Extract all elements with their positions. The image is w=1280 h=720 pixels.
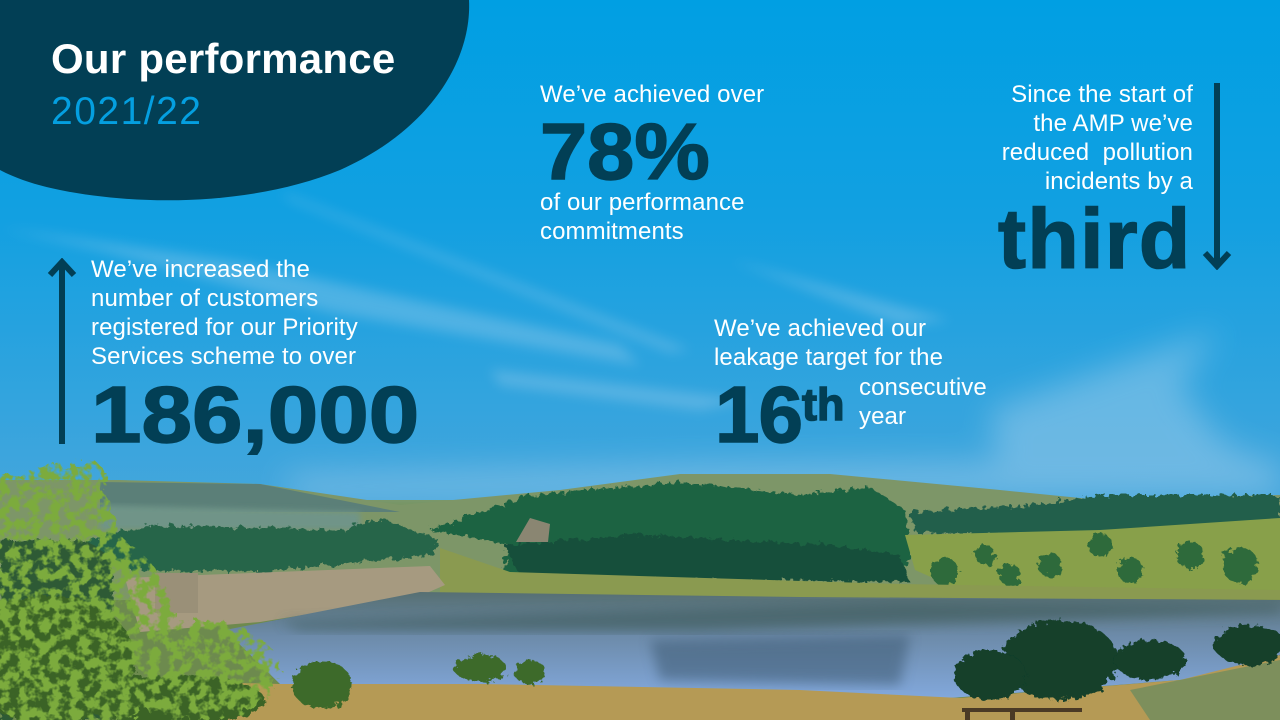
left background trees bbox=[0, 540, 120, 720]
header panel: dark oval bbox=[0, 0, 470, 200]
bushes bbox=[954, 620, 1280, 700]
text: since the start of the AMP: the AMP we’ve bbox=[1033, 110, 1193, 137]
text: since the start of the AMP: reduced pollution bbox=[1002, 139, 1193, 166]
stat: performance commitments bbox=[540, 81, 764, 245]
number: 78%: 78% bbox=[540, 107, 710, 196]
text: consecutive year: consecutive bbox=[859, 374, 987, 401]
number: 16th: 16th bbox=[715, 370, 844, 459]
text: since the start of the AMP: incidents by a bbox=[1045, 168, 1193, 195]
water bbox=[225, 592, 1280, 698]
text: increased customers: registered for our Priority bbox=[91, 314, 358, 341]
text: of our performance commitments: commitments bbox=[540, 218, 684, 245]
icon: down arrow bbox=[1202, 83, 1232, 270]
text: since the start of the AMP bbox=[1002, 81, 1193, 195]
text: consecutive year bbox=[859, 374, 987, 430]
foreground grass bbox=[130, 655, 1280, 720]
fence bbox=[962, 708, 1082, 720]
stat: leakage target bbox=[714, 315, 987, 459]
subtitle: year: 2021/22 bbox=[51, 90, 202, 133]
text: increased customers bbox=[91, 256, 358, 370]
text: since the start of the AMP: Since the start of bbox=[1011, 81, 1193, 108]
text: increased customers: We’ve increased the bbox=[91, 256, 310, 283]
text: consecutive year: year bbox=[859, 403, 906, 430]
text: of our performance commitments bbox=[540, 189, 745, 245]
number: 186,000: 186,000 bbox=[91, 370, 419, 459]
farmland bbox=[905, 518, 1280, 590]
dam tower bbox=[155, 573, 198, 613]
text: achieved leakage target: We’ve achieved our bbox=[714, 315, 926, 342]
stat: pollution incidents bbox=[998, 81, 1232, 286]
number: third: third bbox=[998, 192, 1192, 286]
cottage bbox=[516, 518, 550, 542]
foreground tree: leaves bbox=[0, 460, 280, 720]
icon: up arrow bbox=[48, 258, 76, 444]
text: achieved over: We’ve achieved over bbox=[540, 81, 764, 108]
dam bbox=[125, 566, 445, 632]
foreground tree: shadow layer bbox=[0, 595, 265, 720]
stat: priority services bbox=[48, 256, 419, 459]
text: of our performance commitments: of our performance bbox=[540, 189, 745, 216]
tree belts bbox=[85, 482, 1280, 582]
distant hills bbox=[0, 474, 1280, 600]
text: increased customers: Services scheme to over bbox=[91, 343, 356, 370]
text: achieved leakage target bbox=[714, 315, 943, 371]
title: Our performance bbox=[51, 35, 396, 82]
text: increased customers: number of customers bbox=[91, 285, 318, 312]
text: achieved leakage target: leakage target for the bbox=[714, 344, 943, 371]
